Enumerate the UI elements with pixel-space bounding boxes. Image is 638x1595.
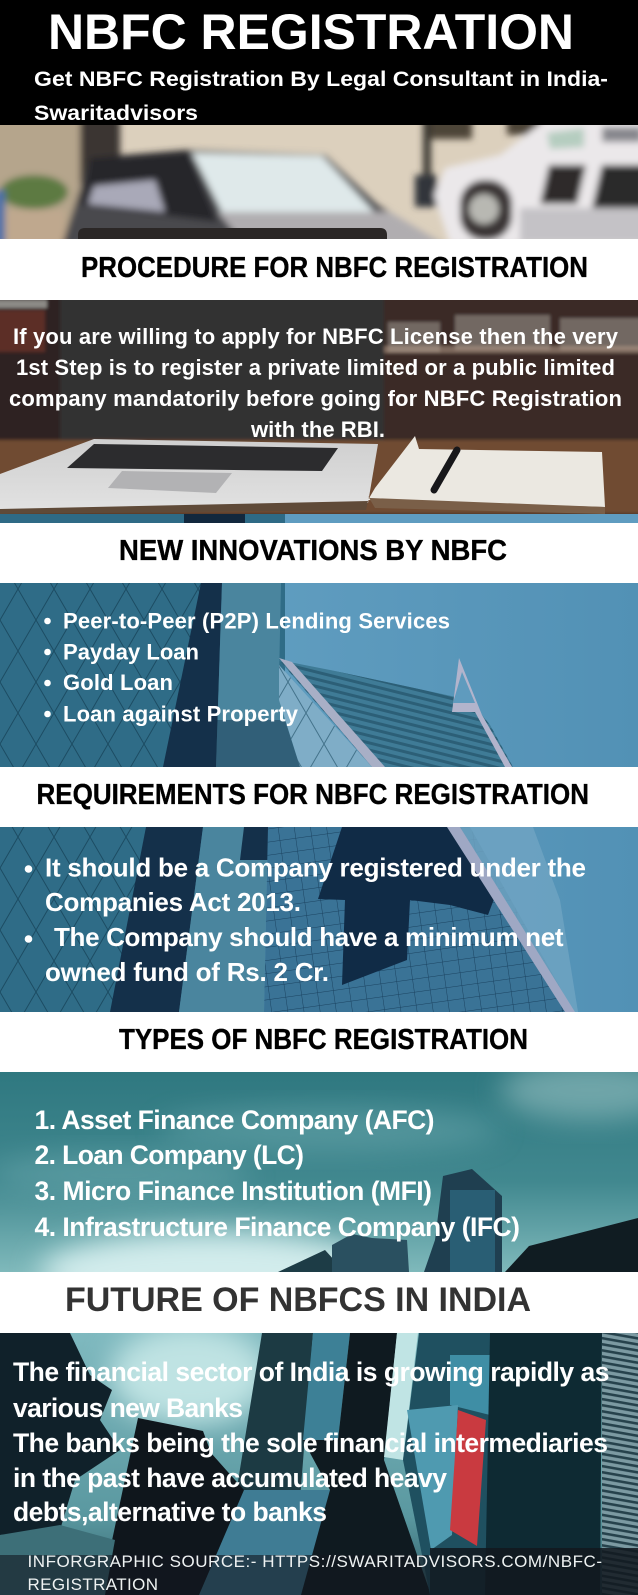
- bulleted list: requirements: It should be a Company registered under the: [45, 852, 586, 882]
- text block: future description: debts,alternative to banks: [13, 1497, 327, 1527]
- text block: procedure description: with the RBI.: [250, 417, 385, 442]
- subtitle: Swaritadvisors: [34, 102, 198, 125]
- panel: requirements heading band: [0, 767, 638, 827]
- panel: procedure photo with text: [0, 295, 638, 523]
- text block: future description: various new Banks: [13, 1393, 243, 1423]
- heading: future: FUTURE OF NBFCS IN INDIA: [65, 1281, 531, 1319]
- photo: glass skyscrapers: [0, 583, 638, 767]
- bulleted list: innovations: Payday Loan: [63, 640, 199, 664]
- panel: types heading band: [0, 1012, 638, 1072]
- text block: procedure description: [9, 324, 622, 442]
- panel: innovations heading band: [0, 523, 638, 583]
- panel: requirements photo with list: [0, 827, 638, 1012]
- laptop lid edge: [78, 228, 387, 239]
- bulleted list: innovations: [44, 608, 450, 726]
- heading: types: TYPES OF NBFC REGISTRATION: [119, 1024, 528, 1056]
- panel: procedure heading band: [0, 239, 638, 300]
- numbered list: NBFC types: 3. Micro Finance Institution (MFI): [34, 1176, 432, 1206]
- bulleted list: innovations: Loan against Property: [63, 702, 299, 726]
- footer: source credit: INFORGRAPHIC SOURCE:- HTTPS://SWARITADVISORS.COM/NBFC-: [28, 1552, 602, 1571]
- text block: future description: [13, 1357, 610, 1527]
- subtitle: [34, 68, 608, 125]
- numbered list: NBFC types: [34, 1105, 520, 1242]
- panel: title header: [0, 0, 638, 125]
- numbered list: NBFC types: 4. Infrastructure Finance Company (IFC): [34, 1212, 520, 1242]
- bulleted list: requirements: [25, 852, 586, 987]
- heading: procedure: PROCEDURE FOR NBFC REGISTRATION: [81, 252, 588, 284]
- panel: future photo with text: [0, 1325, 638, 1595]
- panel: future heading band: [0, 1272, 638, 1333]
- bulleted list: requirements: The Company should have a minimum net: [54, 922, 564, 952]
- text block: future description: The financial sector of India is growing rapidly as: [13, 1357, 610, 1387]
- text block: procedure description: 1st Step is to register a private limited or a public limited: [16, 355, 615, 380]
- photo: blurred cars on a street: [0, 125, 638, 239]
- text block: future description: in the past have accumulated heavy: [13, 1463, 447, 1493]
- photo: glass skyscrapers, lower section: [0, 827, 638, 1012]
- text block: future description: The banks being the sole financial intermediaries: [13, 1428, 608, 1458]
- numbered list: NBFC types: 2. Loan Company (LC): [34, 1140, 304, 1170]
- heading: requirements: REQUIREMENTS FOR NBFC REGISTRATION: [36, 779, 589, 811]
- photo: laptop and notebook on desk: [0, 295, 638, 523]
- subtitle: Get NBFC Registration By Legal Consultant in India-: [34, 68, 608, 91]
- text block: procedure description: company mandatorily before going for NBFC Registration: [9, 386, 622, 411]
- bulleted list: requirements: owned fund of Rs. 2 Cr.: [45, 957, 329, 987]
- numbered list: NBFC types: 1. Asset Finance Company (AFC): [34, 1105, 434, 1135]
- footer: source credit: [28, 1552, 602, 1594]
- title: NBFC REGISTRATION: [48, 4, 574, 60]
- bulleted list: innovations: Peer-to-Peer (P2P) Lending Services: [63, 608, 450, 634]
- heading: innovations: NEW INNOVATIONS BY NBFC: [119, 535, 507, 567]
- text block: procedure description: If you are willing to apply for NBFC License then the very: [13, 324, 619, 349]
- panel: types photo with list: [0, 1072, 638, 1272]
- bulleted list: requirements: Companies Act 2013.: [45, 887, 301, 917]
- photo: teal sky with towers: [0, 1072, 638, 1272]
- photo: city towers with red panel: [0, 1325, 638, 1595]
- panel: innovations photo with list: [0, 583, 638, 767]
- footer: source credit: REGISTRATION: [28, 1575, 158, 1594]
- bulleted list: innovations: Gold Loan: [63, 670, 173, 695]
